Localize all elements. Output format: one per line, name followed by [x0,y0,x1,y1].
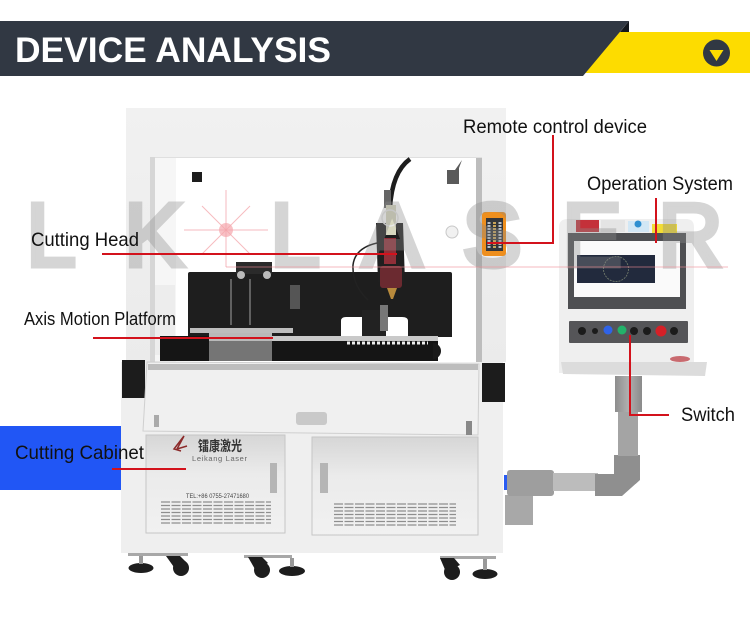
brand logo [174,436,249,500]
keyboard shelf [561,362,707,376]
LK LASER watermark [26,186,728,286]
callout: cutting cabinet: Cutting Cabinet [15,442,145,464]
callout: remote control device: Remote control device [463,116,647,138]
yellow ribbon [585,32,750,73]
callout: switch: Switch [681,404,735,426]
black gantry plate [188,262,452,337]
callout: remote control device [463,116,647,243]
casters and feet [128,553,498,580]
brand logo: 镭康激光 [198,438,242,454]
brand logo: Leikang Laser [192,454,248,463]
cutting head and cable [353,159,410,300]
callout: cutting cabinet [0,426,186,490]
door handles [270,463,277,493]
front flap [143,362,479,435]
header banner [0,21,750,76]
touch screen [568,233,686,309]
laser cutting machine [121,108,506,580]
control arm [504,376,642,525]
watermark star [184,190,728,267]
watermark letters: S [462,186,522,286]
remote control [482,212,506,256]
title: DEVICE ANALYSIS [15,31,331,70]
right vent [334,504,456,525]
icon: down arrow badge [703,40,730,66]
watermark letters: L [270,186,320,286]
callout: operation system: Operation System [587,173,733,195]
cabinet doors [146,435,478,535]
left vent [161,502,271,523]
axis rack [160,328,441,361]
machine window [150,157,482,362]
callout: cutting head: Cutting Head [31,229,139,251]
watermark letters: K [124,186,184,286]
callout: switch [630,335,735,426]
warning stickers [576,220,677,233]
black side bars [122,360,505,402]
watermark letters: L [26,186,76,286]
watermark letters: R [658,186,723,286]
watermark letters [26,186,723,286]
blue label background [0,426,121,490]
callout: axis motion platform: Axis Motion Platform [24,309,176,329]
upper frame [126,108,506,362]
cabinet body [121,362,503,553]
button strip [569,321,688,343]
brand logo: TEL:+86 0755-27471680 [186,493,249,500]
operation panel [559,219,707,376]
watermark letters: A [362,186,422,286]
dark title band [0,21,629,76]
watermark letters: E [562,186,622,286]
